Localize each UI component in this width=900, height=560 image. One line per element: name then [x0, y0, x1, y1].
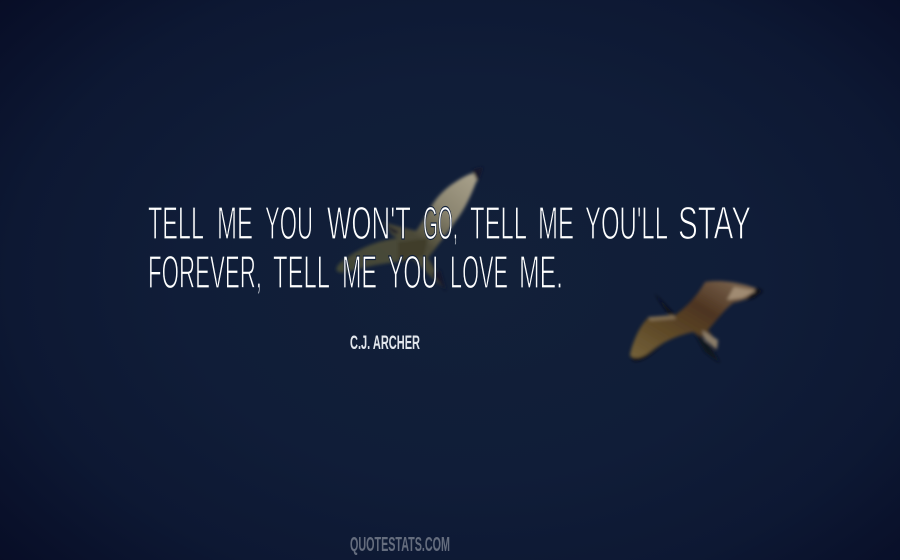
quote line 1: [148, 197, 751, 249]
quote line 2: TELL: [273, 246, 330, 298]
quote line 1: STAY: [678, 197, 751, 249]
author name: C.J. ARCHER: [350, 333, 420, 354]
footer site name: QUOTESTATS.COM: [350, 534, 450, 556]
quote line 1: YOU: [265, 197, 313, 249]
quote line 1: GO,: [423, 197, 458, 249]
quote line 1: ME: [538, 197, 574, 249]
quote line 2: ME.: [519, 246, 563, 298]
quote line 1: YOU'LL: [585, 197, 668, 249]
icon: bird lower right: [630, 281, 763, 363]
quote line 1: TELL: [470, 197, 527, 249]
quote line 1: ME: [217, 197, 253, 249]
quote line 1: WON'T: [327, 197, 411, 249]
quote line 2: LOVE: [450, 246, 508, 298]
quote text: [148, 197, 751, 298]
icon: bird behind the quote: [336, 167, 483, 291]
quote line 2: [148, 246, 563, 298]
quote line 1: TELL: [148, 197, 204, 249]
quote line 2: ME: [342, 246, 377, 298]
quote line 2: YOU: [388, 246, 438, 298]
quote line 2: FOREVER,: [148, 246, 262, 298]
